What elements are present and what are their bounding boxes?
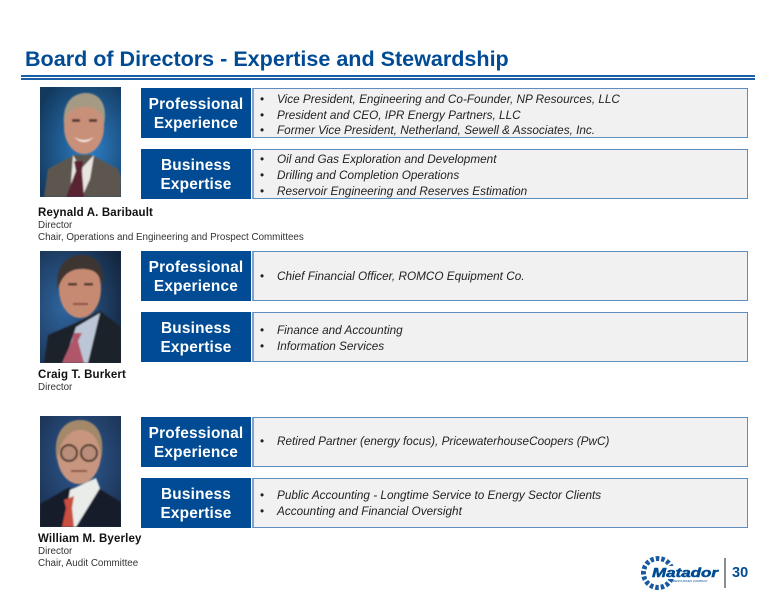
- panel: Baribault professional experience list: •: [260, 93, 264, 106]
- panel: Burkert business expertise heading: Business Expertise: [160, 320, 232, 356]
- panel: Byerley business expertise list: [252, 478, 748, 528]
- panel: Burkert professional experience list: Chief Financial Officer, ROMCO Equipment Co.: [277, 270, 524, 283]
- panel: Byerley professional experience heading: [141, 417, 251, 467]
- name: Baribault: Reynald A. Baribault: [38, 207, 153, 219]
- portrait: Craig T. Burkert: [40, 251, 121, 363]
- logo divider: [724, 558, 726, 588]
- panel: Baribault professional experience list: •: [260, 109, 264, 122]
- panel: Baribault business expertise list: •: [260, 185, 264, 198]
- portrait: William M. Byerley: [40, 416, 121, 527]
- panel: Burkert business expertise list: Finance and Accounting: [277, 324, 403, 337]
- panel: Baribault business expertise list: Reservoir Engineering and Reserves Estimation: [277, 185, 527, 198]
- panel: Byerley business expertise list: •: [260, 505, 264, 518]
- logo: Matador Resources Company: Matador: [652, 565, 719, 580]
- panel: Byerley professional experience heading: Professional Experience: [149, 425, 243, 461]
- panel: Burkert professional experience list: [252, 251, 748, 301]
- panel: Burkert professional experience heading: [141, 251, 251, 301]
- panel: Baribault business expertise list: Oil and Gas Exploration and Development: [277, 153, 496, 166]
- panel: Byerley business expertise heading: Business Expertise: [160, 486, 232, 522]
- role: Baribault: Chair, Operations and Engineering and Prospect Committees: [38, 232, 304, 243]
- panel: Byerley business expertise list: Public Accounting - Longtime Service to Energy Sector Clients: [277, 489, 601, 502]
- panel: Burkert business expertise list: [252, 312, 748, 362]
- panel: Burkert business expertise heading: [141, 312, 251, 362]
- role: Burkert: Director: [38, 382, 72, 393]
- panel: Baribault business expertise heading: Business Expertise: [160, 157, 232, 193]
- role: Baribault: Director: [38, 220, 72, 231]
- panel: Byerley business expertise heading: [141, 478, 251, 528]
- panel: Burkert professional experience heading: Professional Experience: [149, 259, 243, 295]
- role: Baribault: [38, 220, 304, 243]
- panel: Baribault professional experience list: Former Vice President, Netherland, Sewell & Associates, Inc.: [277, 124, 595, 137]
- logo: Matador Resources Company: RESOURCES COMPANY: [673, 579, 708, 583]
- panel: Byerley professional experience list: Retired Partner (energy focus), PricewaterhouseCoopers (PwC): [277, 435, 609, 448]
- panel: Baribault professional experience heading: [141, 88, 251, 138]
- page number: 30: [732, 565, 748, 581]
- role: Byerley: Director: [38, 546, 72, 557]
- panel: Burkert business expertise list: •: [260, 340, 264, 353]
- panel: Burkert business expertise list: Information Services: [277, 340, 384, 353]
- panel: Baribault professional experience list: •: [260, 124, 264, 137]
- panel: Byerley professional experience list: [252, 417, 748, 467]
- panel: Byerley business expertise list: •: [260, 489, 264, 502]
- panel: Baribault business expertise heading: [141, 149, 251, 199]
- portrait: Reynald A. Baribault: [40, 87, 121, 197]
- title rule: [21, 75, 755, 80]
- panel: Baribault business expertise list: [252, 149, 748, 199]
- panel: Baribault professional experience list: President and CEO, IPR Energy Partners, LLC: [277, 109, 521, 122]
- panel: Baribault business expertise list: •: [260, 153, 264, 166]
- panel: Baribault business expertise list: Drilling and Completion Operations: [277, 169, 459, 182]
- panel: Burkert business expertise list: •: [260, 324, 264, 337]
- panel: Byerley business expertise list: Accounting and Financial Oversight: [277, 505, 462, 518]
- panel: Baribault professional experience list: [252, 88, 748, 138]
- panel: Burkert professional experience list: •: [260, 270, 264, 283]
- panel: Byerley professional experience list: •: [260, 435, 264, 448]
- panel: Baribault professional experience list: Vice President, Engineering and Co-Founder, NP Resources, LLC: [277, 93, 620, 106]
- name: Burkert: Craig T. Burkert: [38, 369, 126, 381]
- name: Byerley: William M. Byerley: [38, 533, 142, 545]
- logo: Matador Resources Company: [641, 556, 720, 590]
- title: Board of Directors - Expertise and Stewardship: [25, 46, 509, 71]
- panel: Baribault professional experience heading: Professional Experience: [149, 96, 243, 132]
- role: Byerley: Chair, Audit Committee: [38, 558, 138, 569]
- panel: Baribault business expertise list: •: [260, 169, 264, 182]
- role: Byerley: [38, 546, 138, 569]
